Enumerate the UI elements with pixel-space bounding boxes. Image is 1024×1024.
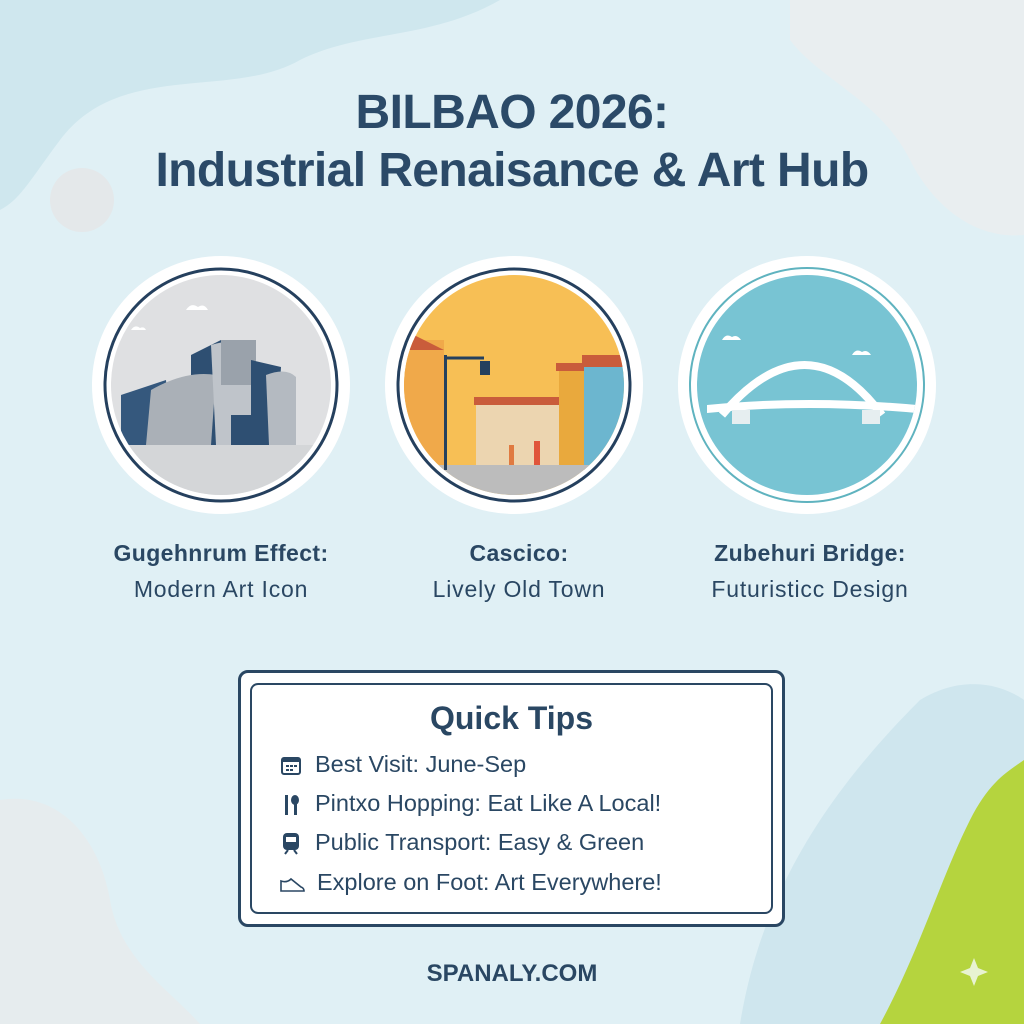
title — [155, 86, 869, 197]
heading: Quick Tips: Quick Tips — [430, 700, 593, 736]
label: Cascico: Lively Old Town — [433, 576, 605, 602]
label: Cascico: Cascico: — [469, 540, 569, 566]
icon: Zubizuri bridge circle — [678, 256, 936, 514]
label: Zubehuri: Zubehuri Bridge: — [714, 540, 906, 566]
tip 1: Best Visit: June-Sep — [315, 751, 526, 777]
label: Guggenheim: Gugehnrum Effect: — [113, 540, 329, 566]
title: Industrial Renaisance & Art Hub — [155, 144, 869, 197]
tip 3: Public Transport: Easy & Green — [315, 829, 644, 855]
tip 4: Explore on Foot: Art Everywhere! — [317, 869, 662, 895]
label: Guggenheim — [113, 540, 329, 602]
tip 2: Pintxo Hopping: Eat Like A Local! — [315, 790, 661, 816]
footer: SPANALY.COM — [427, 960, 597, 987]
label: Cascico — [433, 540, 605, 602]
icon: Casco Viejo circle — [385, 256, 643, 514]
label: Guggenheim: Modern Art Icon — [134, 576, 308, 602]
title: BILBAO 2026: — [356, 86, 668, 139]
label: Zubehuri — [711, 540, 909, 602]
icon: Guggenheim circle — [92, 256, 350, 514]
panel: quick tips — [238, 670, 785, 927]
label: Zubehuri: Futuristicc Design — [711, 576, 909, 602]
